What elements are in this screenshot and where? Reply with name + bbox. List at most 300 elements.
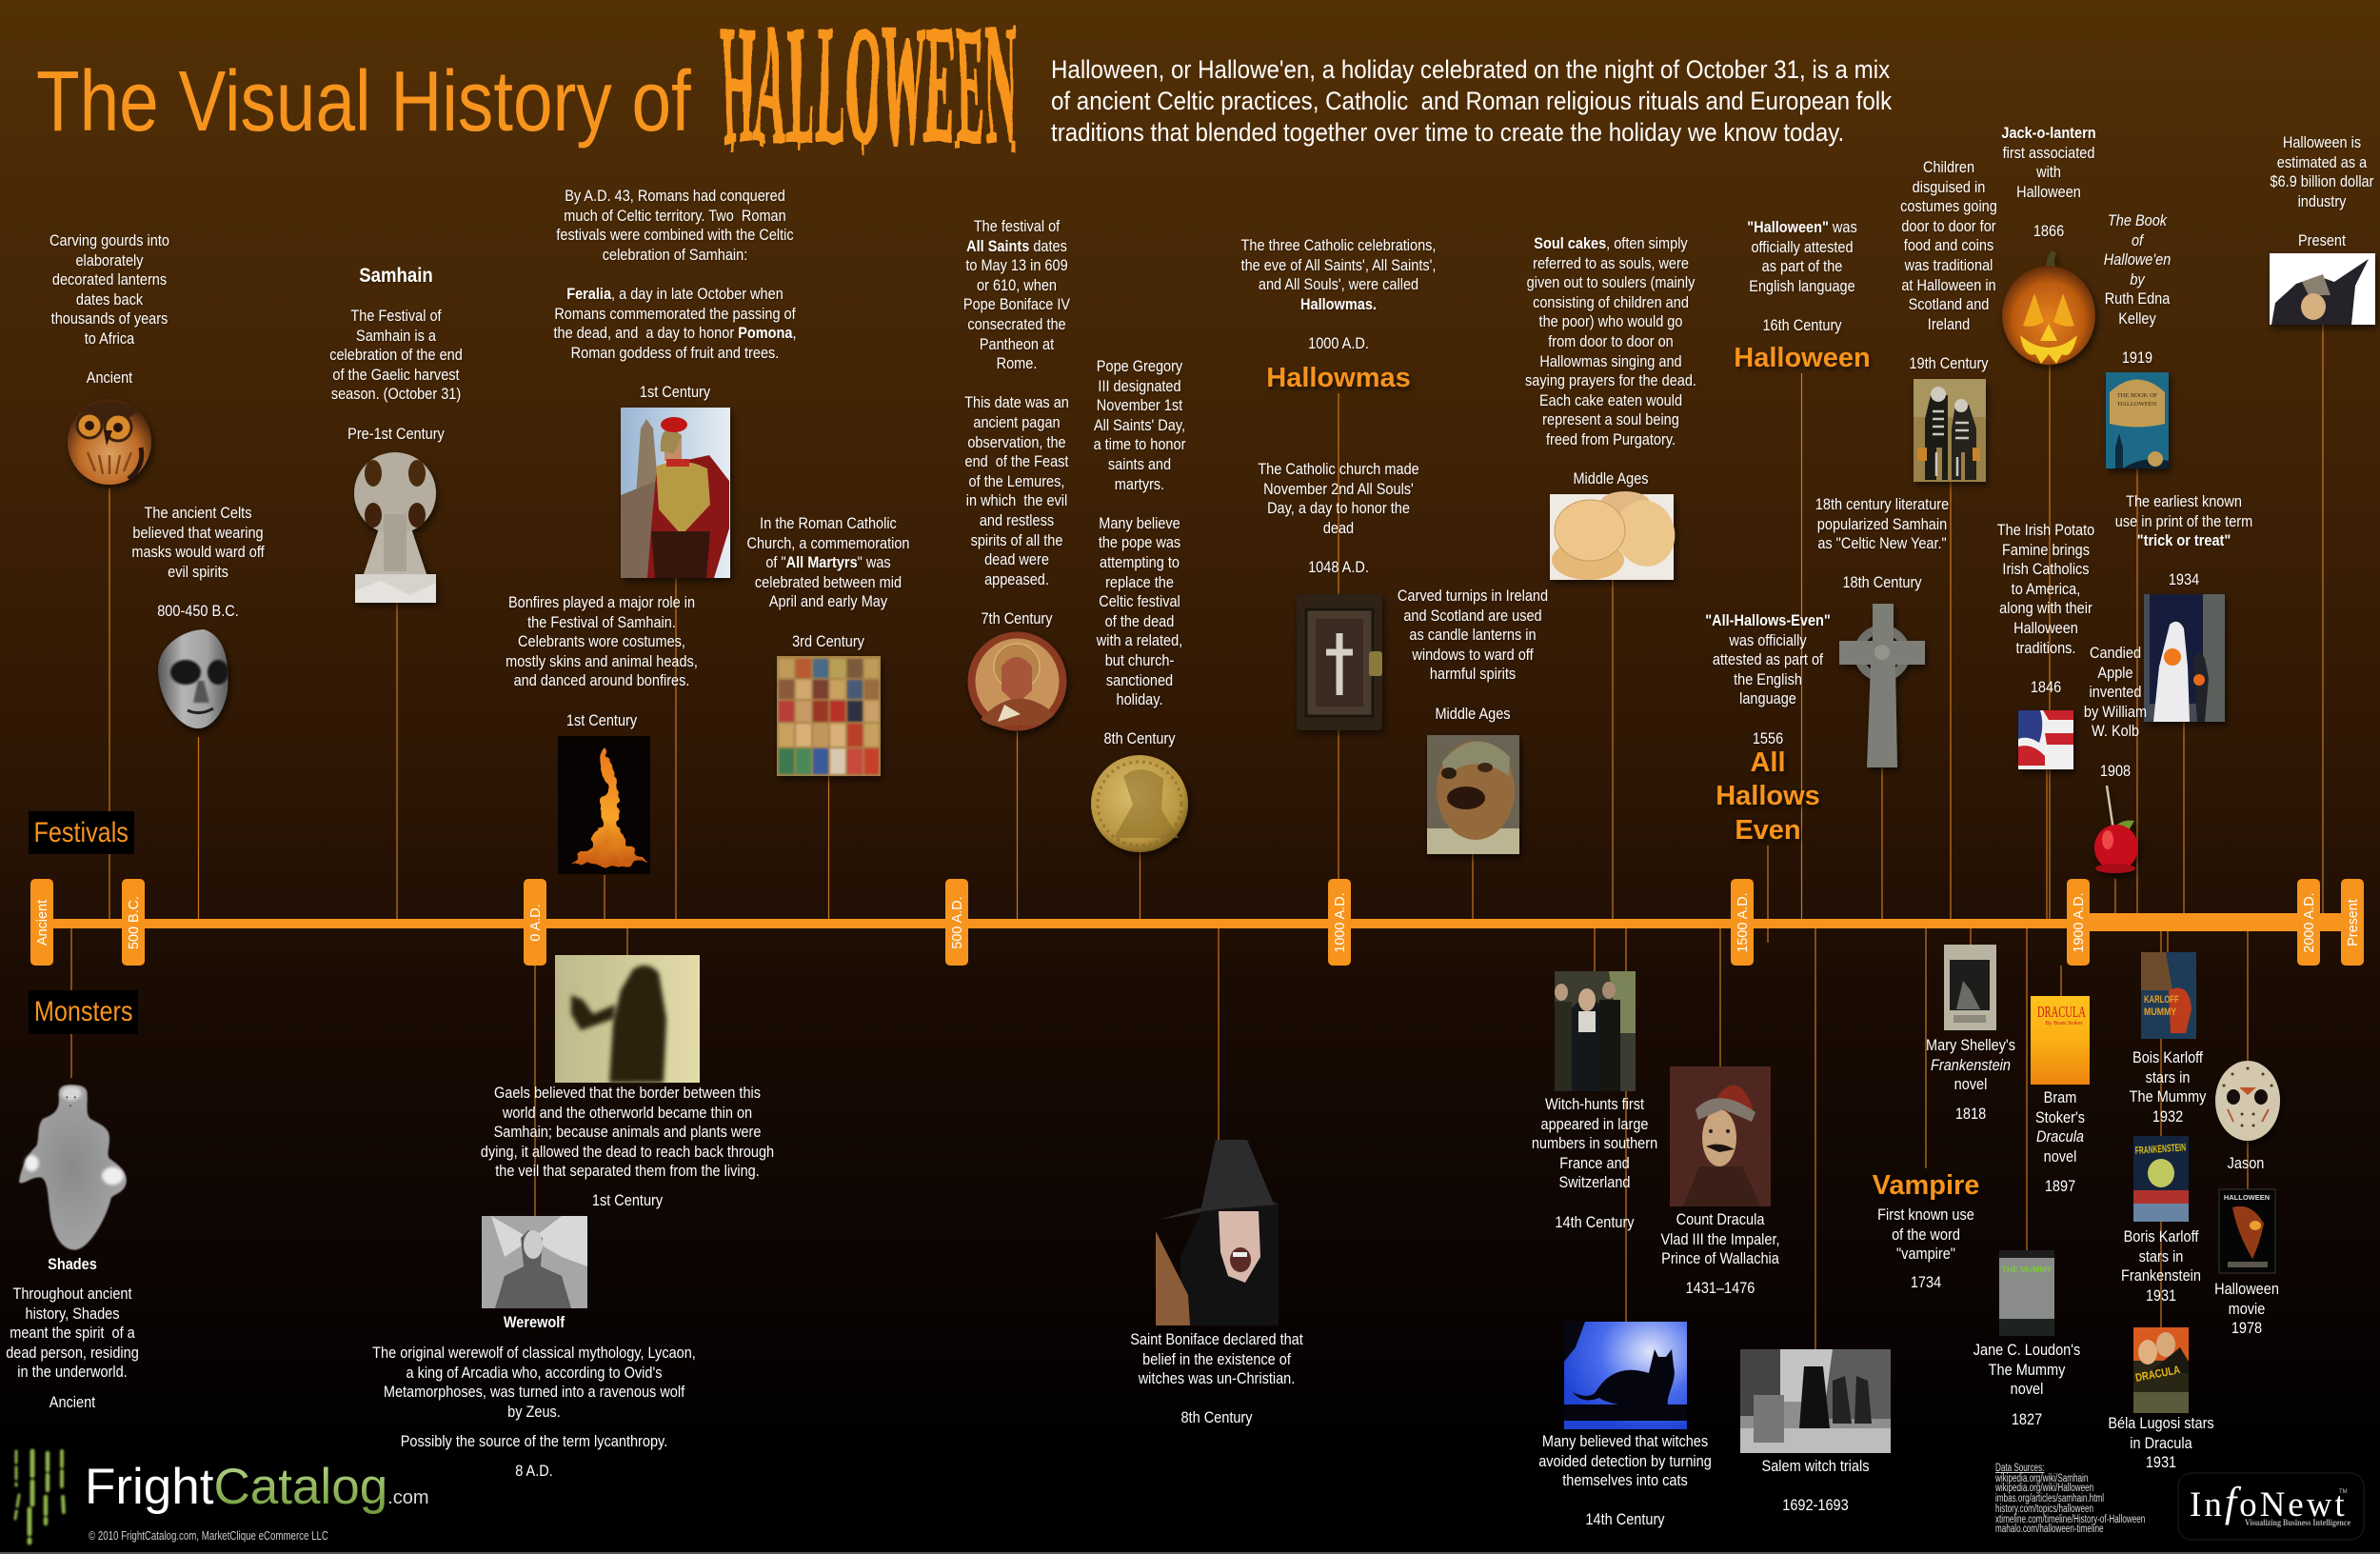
- text: vampire date: 1734: [1911, 1273, 1941, 1291]
- text: Saint Boniface: 8th Century: [1180, 1408, 1253, 1426]
- text: All Saints: ancient pagan: [973, 413, 1061, 431]
- text: All-Hallows-Even: the English: [1734, 670, 1802, 688]
- text: All Martyrs: [746, 514, 910, 650]
- text: Pope Gregory III: Pope Gregory: [1097, 357, 1182, 375]
- text: Irish Potato Famine: to America,: [2012, 580, 2080, 598]
- text: Salem witch trials: 1692-1693: [1782, 1496, 1849, 1514]
- text: first use of vampire: First known use: [1877, 1205, 1974, 1224]
- text: Lugosi in Dracula: [2108, 1414, 2214, 1471]
- text: All Souls' Day: dead: [1323, 519, 1354, 537]
- text: Pope Gregory III: III designated: [1098, 377, 1181, 395]
- text: first use of vampire: [1877, 1205, 1974, 1263]
- text: carved turnips: Middle Ages: [1435, 705, 1511, 723]
- text: witches as cats: Many believed that witches: [1542, 1432, 1708, 1450]
- text: Werewolf date: 8 A.D.: [515, 1462, 553, 1480]
- text: 18th century literature: as "Celtic New Year.": [1817, 534, 1947, 552]
- text: All-Hallows-Even: "All-Hallows-Even": [1705, 611, 1831, 629]
- text: ancient Celts masks: believed that wearing: [132, 524, 264, 542]
- text: Halloween attested: English language: [1749, 277, 1855, 295]
- text: Shades: [6, 1285, 139, 1381]
- text: witches as cats: avoided detection by turning: [1538, 1452, 1712, 1470]
- text: Halloween movie: 1978: [2231, 1319, 2262, 1337]
- text: children in costumes: [1900, 158, 1997, 373]
- text: children in costumes: door to door for: [1901, 217, 1996, 235]
- text: soul cakes: Soul cakes, often simply: [1534, 234, 1688, 252]
- intro paragraph: traditions that blended together over time to create the holiday we know today.: [1051, 118, 1844, 147]
- logo: InfoNewt: TM: [2339, 1489, 2348, 1495]
- image: The Mummy movie poster: [2141, 952, 2196, 1039]
- text: Pope Gregory III: but church-: [1105, 651, 1174, 669]
- text: Pope Gregory III: attempting to: [1100, 553, 1180, 571]
- text: bonfires: and danced around bonfires.: [514, 671, 689, 689]
- text: Samhain festival: season. (October 31): [331, 385, 461, 403]
- text: carved turnips: Carved turnips in Ireland: [1398, 587, 1548, 605]
- text: Gaels border: dying, it allowed the dead to reach back through: [481, 1143, 774, 1161]
- text: ancient Celts masks: 800-450 B.C.: [157, 602, 239, 620]
- text: children in costumes: food and coins: [1904, 236, 1993, 254]
- text: Halloween attested: officially attested: [1751, 238, 1854, 256]
- text: Jane Loudon: novel: [2011, 1380, 2043, 1398]
- text: jack-o-lantern: with: [2036, 163, 2061, 181]
- heading: Vampire: Vampire: [1873, 1170, 1979, 1201]
- image: The Mummy novel cover: [1999, 1250, 2054, 1336]
- text: bonfires: [506, 593, 698, 729]
- text: Pope Gregory III: Celtic festival: [1099, 592, 1180, 610]
- text: Karloff in The Mummy: Bois Karloff: [2132, 1048, 2203, 1066]
- text: industry value: Present: [2298, 231, 2346, 249]
- text: Jason: Jason: [2228, 1154, 2264, 1172]
- text: copyright: © 2010 FrightCatalog.com, MarketClique eCommerce LLC: [89, 1529, 328, 1543]
- heading: Halloween: Halloween: [1734, 343, 1871, 373]
- text: All Saints: Pantheon at: [980, 335, 1054, 353]
- text: Werewolf: [372, 1344, 696, 1421]
- text: Halloween attested: [1747, 218, 1857, 335]
- text: Saint Boniface: Saint Boniface declared that: [1130, 1330, 1303, 1348]
- text: 18th century literature: [1815, 495, 1950, 591]
- text: All Saints: or 610, when: [977, 276, 1057, 294]
- logo: InfoNewt: InfoNewt: [2190, 1479, 2348, 1525]
- text: All Souls' Day: November 2nd All Souls': [1263, 480, 1414, 498]
- text: Pope Gregory III: 8th Century: [1103, 729, 1176, 747]
- text: Romans and Feralia: Roman goddess of fruit and trees.: [571, 344, 779, 362]
- text: The Book of Hallowe'en: 1919: [2122, 349, 2152, 367]
- text: candied apple: 1908: [2100, 762, 2131, 780]
- text: trick or treat: [2115, 492, 2252, 588]
- text: All Saints: spirits of all the: [971, 531, 1062, 548]
- era tick: Present: Present: [2346, 899, 2361, 946]
- text: Samhain festival: The Festival of: [350, 307, 442, 325]
- text: Pope Gregory III: holiday.: [1117, 690, 1162, 708]
- bottom edge rule: [0, 1552, 2380, 1554]
- text: Jane Loudon: Jane C. Loudon's: [1973, 1341, 2080, 1359]
- text: Lugosi in Dracula: 1931: [2146, 1453, 2176, 1471]
- text: The Book of Hallowe'en: by: [2130, 270, 2145, 289]
- image: carved owl gourd: [68, 399, 151, 485]
- image: Halloween movie poster: [2219, 1189, 2275, 1273]
- text: Count Dracula: [1660, 1210, 1780, 1267]
- text: soul cakes: the poor) who would go: [1539, 312, 1682, 330]
- image: Pope Boniface IV portrait: [967, 632, 1066, 731]
- text: trick or treat: 1934: [2169, 570, 2199, 588]
- text: Romans and Feralia: much of Celtic territory. Two Roman: [564, 207, 786, 225]
- category label: Monsters: Monsters: [34, 996, 133, 1027]
- text: candied apple: W. Kolb: [2092, 722, 2139, 740]
- text: All Saints: The festival of: [974, 217, 1060, 235]
- text: Lugosi in Dracula: Béla Lugosi stars: [2108, 1414, 2214, 1432]
- text: soul cakes: Middle Ages: [1573, 469, 1649, 488]
- image: Dracula novel cover: [2031, 996, 2090, 1085]
- intro paragraph: of ancient Celtic practices, Catholic and Roman religious rituals and European folk: [1051, 87, 1892, 115]
- text: data sources: xtimeline.com/timeline/History-of-Halloween: [1995, 1514, 2145, 1525]
- text: Gaels border: world and the otherworld became thin on: [503, 1104, 752, 1122]
- text: industry value: industry: [2298, 192, 2346, 210]
- text: lycanthropy note: Possibly the source of the term lycanthropy.: [401, 1432, 667, 1450]
- text: Gaels border: the veil that separated them from the living.: [495, 1162, 760, 1180]
- text: Hallowmas intro: Hallowmas.: [1300, 295, 1377, 313]
- text: Irish Potato Famine: along with their: [1999, 599, 2092, 617]
- image: grey Celtic cross: [1839, 604, 1925, 767]
- text: Romans and Feralia: [553, 187, 797, 402]
- text: industry value: $6.9 billion dollar: [2271, 172, 2373, 190]
- era tick: 500 A.D.: 500 A.D.: [950, 896, 965, 949]
- text: The Book of Hallowe'en: [2104, 211, 2171, 367]
- text: Romans and Feralia: By A.D. 43, Romans had conquered: [565, 187, 785, 205]
- text: 18th century literature: popularized Samhain: [1817, 515, 1947, 533]
- text: Werewolf: Metamorphoses, was turned into a ravenous wolf: [384, 1383, 684, 1401]
- text: Karloff in The Mummy: stars in: [2146, 1068, 2190, 1086]
- text: witch hunts: France and: [1559, 1154, 1630, 1172]
- text: Gaels border: [481, 1084, 774, 1180]
- image: Dracula novel cover: By Bram Stoker: [2045, 1021, 2083, 1026]
- text: All-Hallows-Even: was officially: [1729, 631, 1807, 649]
- intro paragraph: [1051, 55, 1893, 147]
- image: Salem witch trials engraving: [1740, 1349, 1891, 1453]
- text: Pope Gregory III: [1094, 357, 1186, 747]
- text: All Saints: consecrated the: [967, 315, 1066, 333]
- image: Halloween movie poster: HALLOWEEN: [2224, 1193, 2270, 1202]
- text: Frankenstein novel: [1926, 1036, 2015, 1093]
- text: Halloween movie: movie: [2229, 1300, 2265, 1318]
- text: Halloween attested: "Halloween" was: [1747, 218, 1857, 236]
- image: Frankenstein novel cover: [1944, 945, 1996, 1030]
- text: soul cakes: [1525, 234, 1696, 488]
- text: industry value: estimated as a: [2277, 153, 2367, 171]
- text: Pope Gregory III: replace the: [1105, 573, 1174, 591]
- text: Irish Potato Famine: Famine brings: [2002, 541, 2090, 559]
- text: jack-o-lantern: 1866: [2033, 222, 2064, 240]
- text: Irish Potato Famine: [1997, 521, 2094, 696]
- text: carved turnips: as candle lanterns in: [1409, 626, 1537, 644]
- text: witch hunts: 14th Century: [1555, 1213, 1635, 1231]
- text: Pope Gregory III: Many believe: [1099, 514, 1180, 532]
- text: witch hunts: Witch-hunts first: [1545, 1095, 1644, 1113]
- text: All Saints: appeased.: [984, 570, 1049, 588]
- text: bonfires: the Festival of Samhain.: [527, 613, 676, 631]
- text: Werewolf: a king of Arcadia who, according to Ovid's: [406, 1364, 663, 1382]
- text: Saint Boniface: [1130, 1330, 1303, 1426]
- image: Dracula movie poster: [2133, 1327, 2189, 1413]
- text: Irish Potato Famine: Halloween: [2013, 619, 2078, 637]
- text: The Book of Hallowe'en: of: [2132, 231, 2143, 249]
- text: soul cakes: referred to as souls, were: [1533, 254, 1689, 272]
- text: Pope Gregory III: sanctioned: [1106, 670, 1173, 689]
- text: carving gourds: decorated lanterns: [52, 270, 167, 289]
- text: Shades date: Ancient: [50, 1393, 95, 1411]
- text: All Saints: in which the evil: [966, 491, 1067, 509]
- image: Dracula novel cover: DRACULA: [2037, 1004, 2086, 1022]
- text: industry value: [2270, 133, 2374, 249]
- text: data sources: wikipedia.org/wiki/Halloween: [1995, 1483, 2093, 1494]
- image: children trick-or-treating: [2144, 594, 2225, 722]
- text: All Souls' Day: Day, a day to honor the: [1267, 499, 1410, 517]
- text: Salem witch trials: Salem witch trials: [1762, 1457, 1869, 1475]
- text: Halloween attested: as part of the: [1762, 257, 1842, 275]
- text: Romans and Feralia: celebration of Samhain:: [603, 246, 747, 264]
- text: All Martyrs: of "All Martyrs" was: [765, 553, 891, 571]
- text: first use of vampire: "vampire": [1896, 1245, 1955, 1263]
- text: Shades: Throughout ancient: [12, 1285, 132, 1303]
- text: jack-o-lantern: [2001, 124, 2096, 240]
- text: Bram Stoker: novel: [2044, 1147, 2076, 1166]
- image: The Book of Hallowe'en cover: [2106, 372, 2169, 468]
- text: candied apple: Candied: [2090, 644, 2141, 662]
- text: carving gourds: [50, 231, 169, 387]
- image: werewolf engraving: [482, 1216, 587, 1308]
- intro paragraph: Halloween, or Hallowe'en, a holiday celebrated on the night of October 31, is a mix: [1051, 55, 1890, 84]
- text: children in costumes: disguised in: [1913, 178, 1985, 196]
- image: Dracula movie poster: DRACULA: [2134, 1364, 2181, 1385]
- text: witches as cats: [1538, 1432, 1712, 1528]
- era tick: 1500 A.D.: 1500 A.D.: [1735, 892, 1751, 953]
- text: Hallowmas intro: The three Catholic celebrations,: [1241, 236, 1436, 254]
- text: Karloff in Frankenstein: [2121, 1227, 2201, 1305]
- text: Karloff in The Mummy: The Mummy: [2130, 1087, 2206, 1106]
- heading: All Hallows Even: All: [1750, 747, 1786, 778]
- text: witch hunts: Switzerland: [1558, 1173, 1631, 1191]
- text: carving gourds: dates back: [76, 290, 143, 309]
- text: Bram Stoker: Bram: [2044, 1088, 2076, 1106]
- text: Hallowmas intro: the eve of All Saints', All Saints',: [1241, 256, 1436, 274]
- connector lines: [71, 325, 2323, 1349]
- text: Halloween attested: 16th Century: [1762, 316, 1842, 334]
- text: Gaels border: Samhain; because animals and plants were: [494, 1123, 761, 1141]
- text: Shades: dead person, residing: [6, 1344, 139, 1362]
- image: American flag: [2018, 710, 2073, 769]
- text: Bram Stoker: [2035, 1088, 2085, 1166]
- text: carving gourds: elaborately: [75, 251, 144, 269]
- era tick: Present: [2341, 879, 2364, 966]
- text: All-Hallows-Even: 1556: [1753, 729, 1783, 747]
- text: Saint Boniface: belief in the existence of: [1142, 1350, 1291, 1368]
- text: Karloff in Frankenstein: stars in: [2139, 1247, 2183, 1265]
- image: soul cakes: [1550, 491, 1682, 580]
- text: Gaels border: Gaels believed that the border between this: [494, 1084, 761, 1102]
- image: children in skeleton costumes: [1914, 379, 1986, 482]
- text: Halloween movie: Halloween: [2214, 1280, 2279, 1298]
- image: All Martyrs painting: [777, 656, 881, 776]
- image: Frankenstein movie poster: [2133, 1136, 2189, 1222]
- image: witch holding pumpkin, present day: [2270, 253, 2375, 325]
- text: soul cakes: Hallowmas singing and: [1539, 352, 1682, 370]
- text: Pope Gregory III: of the dead: [1105, 612, 1174, 630]
- text: witch hunts: [1532, 1095, 1657, 1231]
- era tick: 0 A.D.: [524, 879, 546, 966]
- text: Pope Gregory III: with a related,: [1097, 631, 1182, 649]
- text: Samhain festival: of the Gaelic harvest: [332, 366, 460, 384]
- text: Frankenstein novel date: 1818: [1955, 1105, 1986, 1123]
- text: trick or treat: "trick or treat": [2137, 531, 2231, 549]
- image: gold papal medal: [1091, 755, 1188, 852]
- text: carved turnips: windows to ward off: [1412, 646, 1534, 664]
- text: carved turnips: and Scotland are used: [1403, 607, 1542, 625]
- heading: All Hallows Even: Even: [1735, 815, 1801, 846]
- heading: All Hallows Even: [1716, 747, 1821, 846]
- text: industry value: Halloween is: [2283, 133, 2361, 151]
- era tick: 500 B.C.: 500 B.C.: [127, 896, 142, 949]
- image: silver Celtic mask: [158, 629, 228, 728]
- text: All Martyrs: In the Roman Catholic: [760, 514, 897, 532]
- heading: All Hallows Even: Hallows: [1716, 781, 1820, 811]
- text: data sources: [1995, 1464, 2145, 1535]
- text: children in costumes: at Halloween in: [1901, 276, 1996, 294]
- text: Karloff in Frankenstein: Boris Karloff: [2124, 1227, 2198, 1245]
- text: Count Dracula: Count Dracula: [1676, 1210, 1764, 1228]
- heading: Hallowmas: Hallowmas: [1266, 363, 1411, 393]
- text: The Book of Hallowe'en: Kelley: [2118, 309, 2156, 328]
- text: Salem witch trials: [1762, 1457, 1869, 1514]
- image: Vlad the Impaler portrait: [1670, 1066, 1771, 1206]
- text: Samhain festival: [329, 307, 463, 444]
- logo: FrightCatalog.com wordmark: FrightCatalog.com: [85, 1459, 429, 1515]
- image: The Mummy movie poster: MUMMY: [2144, 1006, 2177, 1018]
- text: Pope Gregory III: martyrs.: [1115, 475, 1164, 493]
- text: 18th century literature: 18th century literature: [1815, 495, 1949, 513]
- text: All Saints: to May 13 in 609: [965, 256, 1068, 274]
- text: children in costumes: Children: [1923, 158, 1974, 176]
- text: carving gourds: Carving gourds into: [50, 231, 169, 249]
- text: witches as cats: 14th Century: [1585, 1510, 1665, 1528]
- image: antique bible with cross: [1297, 594, 1382, 730]
- text: jack-o-lantern: Jack-o-lantern: [2001, 124, 2096, 142]
- text: ancient Celts masks: The ancient Celts: [145, 504, 251, 522]
- text: Samhain festival: celebration of the end: [329, 346, 463, 364]
- image: The Mummy movie poster: KARLOFF: [2144, 994, 2179, 1006]
- text: All Martyrs: Church, a commemoration: [746, 534, 910, 552]
- text: Bram Stoker date: 1897: [2045, 1177, 2075, 1195]
- text: Frankenstein novel: novel: [1954, 1075, 1987, 1093]
- image: bonfire: [558, 736, 650, 874]
- text: Shades: in the underworld.: [17, 1363, 128, 1381]
- era tick: Ancient: [30, 879, 53, 966]
- image: The Book of Hallowe'en cover: THE BOOK OF: [2117, 392, 2158, 399]
- text: Shades: history, Shades: [26, 1305, 119, 1323]
- logo: InfoNewt: Visualizing Business Intelligence: [2245, 1519, 2350, 1528]
- text: All Saints: Pope Boniface IV: [963, 295, 1070, 313]
- text: carved turnips: harmful spirits: [1430, 665, 1516, 683]
- era tick: 2000 A.D.: [2297, 879, 2320, 966]
- text: soul cakes: saying prayers for the dead.: [1525, 371, 1696, 389]
- text: All Souls' Day: 1048 A.D.: [1308, 558, 1369, 576]
- text: Karloff in Frankenstein: 1931: [2146, 1286, 2176, 1305]
- text: Werewolf: The original werewolf of classical mythology, Lycaon,: [372, 1344, 696, 1362]
- text: Werewolf heading: Werewolf: [504, 1313, 565, 1331]
- text: All Souls' Day: The Catholic church made: [1258, 460, 1419, 478]
- text: data sources: Data Sources:: [1995, 1463, 2044, 1474]
- text: All-Hallows-Even: [1705, 611, 1831, 747]
- text: Shades: meant the spirit of a: [10, 1324, 135, 1342]
- text: Bram Stoker: Dracula: [2036, 1127, 2084, 1146]
- text: Pope Gregory III: the pope was: [1099, 533, 1180, 551]
- era tick: 0 A.D.: 0 A.D.: [528, 904, 544, 942]
- text: Karloff in The Mummy: [2129, 1048, 2207, 1126]
- image: shadow figure behind veil: [555, 955, 700, 1083]
- text: Pope Gregory III: November 1st: [1097, 396, 1182, 414]
- image: stone Celtic cross on plinth: [354, 452, 436, 603]
- title: The Visual History of: The Visual History of: [36, 54, 691, 149]
- text: The Book of Hallowe'en: Hallowe'en: [2104, 250, 2171, 269]
- category label: Festivals: Festivals: [33, 817, 129, 848]
- text: witches as cats: themselves into cats: [1562, 1471, 1688, 1489]
- text: Irish Potato Famine: The Irish Potato: [1997, 521, 2094, 539]
- text: Gaels date: 1st Century: [592, 1191, 663, 1209]
- text: data sources: wikipedia.org/wiki/Samhain: [1995, 1473, 2088, 1484]
- text: Dracula dates: 1431–1476: [1686, 1279, 1755, 1297]
- text: children in costumes: was traditional: [1905, 256, 1993, 274]
- era tick: 500 A.D.: [945, 879, 968, 966]
- text: Romans and Feralia: Feralia, a day in late October when: [566, 285, 783, 303]
- text: All Saints: [963, 217, 1070, 628]
- text: 18th century literature: 18th Century: [1842, 573, 1922, 591]
- timeline axis bar: [30, 913, 2364, 931]
- text: Count Dracula: Prince of Wallachia: [1661, 1249, 1779, 1267]
- text: Saint Boniface: witches was un-Christian.: [1139, 1369, 1295, 1387]
- text: Karloff in The Mummy: 1932: [2152, 1107, 2183, 1126]
- text: Karloff in Frankenstein: Frankenstein: [2121, 1266, 2201, 1285]
- text: carved turnips: [1398, 587, 1548, 723]
- category label: Festivals: [29, 811, 134, 854]
- text: All Saints: 7th Century: [981, 609, 1053, 628]
- text: Romans and Feralia: Romans commemorated the passing of: [554, 305, 796, 323]
- image: candied apple: [2094, 786, 2138, 873]
- text: soul cakes: consisting of children and: [1533, 293, 1689, 311]
- text: All Saints: of the Lemures,: [969, 472, 1064, 490]
- text: Irish Potato Famine: traditions.: [2016, 639, 2075, 657]
- text: Jane Loudon: The Mummy: [1989, 1361, 2065, 1379]
- text: Pope Gregory III: All Saints' Day,: [1094, 416, 1185, 434]
- text: data sources: imbas.org/articles/samhain.html: [1995, 1493, 2104, 1504]
- text: All Martyrs: April and early May: [769, 592, 887, 610]
- text: data sources: mahalo.com/halloween-timeline: [1995, 1524, 2104, 1535]
- text: Werewolf: by Zeus.: [507, 1403, 561, 1421]
- text: Samhain festival: Samhain is a: [356, 327, 436, 345]
- text: candied apple: Apple: [2097, 664, 2133, 682]
- text: Frankenstein novel: Mary Shelley's: [1926, 1036, 2015, 1054]
- text: All Saints: and restless: [980, 511, 1054, 529]
- text: soul cakes: represent a soul being: [1542, 410, 1679, 428]
- image: glowing jack-o-lantern: [2002, 250, 2095, 365]
- image: ghostly shade: [19, 1085, 127, 1250]
- text: candied apple: invented: [2090, 683, 2141, 701]
- text: children in costumes: 19th Century: [1909, 354, 1989, 372]
- text: Frankenstein novel: Frankenstein: [1931, 1056, 2011, 1074]
- text: All Saints: This date was an: [964, 393, 1069, 411]
- image: Roman centurion: [621, 408, 730, 578]
- text: carving gourds: to Africa: [85, 329, 134, 348]
- text: bonfires: Celebrants wore costumes,: [518, 632, 685, 650]
- era tick: 1000 A.D.: [1328, 879, 1351, 966]
- image: carved turnip lantern: [1427, 735, 1519, 854]
- text: All-Hallows-Even: attested as part of: [1713, 650, 1823, 668]
